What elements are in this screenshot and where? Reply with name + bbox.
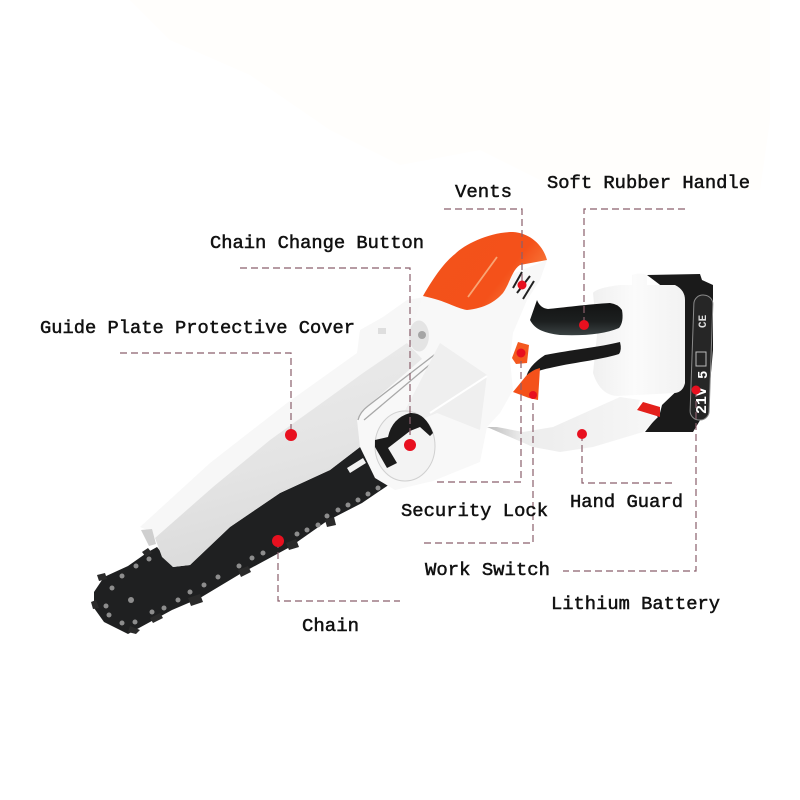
bar slot — [347, 458, 366, 473]
label: vents: Vents — [455, 182, 512, 203]
vents — [513, 272, 534, 299]
orange top cover — [423, 232, 547, 310]
chain cutters — [91, 517, 336, 634]
battery black housing — [645, 274, 713, 432]
label: guide plate protective cover: Guide Plate Protective Cover — [40, 318, 355, 339]
label: security lock: Security Lock — [401, 501, 548, 522]
guide plate protective cover — [140, 297, 425, 567]
guide bar and chain — [91, 445, 390, 634]
label: chain: Chain — [302, 616, 359, 637]
red battery latch — [637, 402, 660, 417]
label: lithium battery: Lithium Battery — [551, 594, 720, 615]
battery label: 5 — [696, 371, 712, 379]
chainsaw illustration — [91, 232, 713, 634]
plate facet — [395, 343, 487, 430]
handle lower grip — [526, 342, 621, 378]
head body — [357, 260, 547, 490]
work switch trigger — [513, 368, 540, 400]
battery label — [690, 295, 713, 420]
battery label: CE — [698, 314, 710, 328]
callout dots — [272, 280, 700, 547]
handle upper grip — [530, 300, 623, 335]
label: chain change button: Chain Change Button — [210, 233, 424, 254]
battery label: 21V — [694, 387, 711, 414]
label: work switch: Work Switch — [425, 560, 550, 581]
chain change disc — [375, 411, 435, 481]
security lock — [512, 342, 529, 364]
hand guard — [487, 397, 658, 452]
battery mount white — [593, 274, 685, 396]
label: soft rubber handle: Soft Rubber Handle — [547, 173, 750, 194]
label: hand guard: Hand Guard — [570, 492, 683, 513]
callout leader lines — [120, 209, 696, 601]
